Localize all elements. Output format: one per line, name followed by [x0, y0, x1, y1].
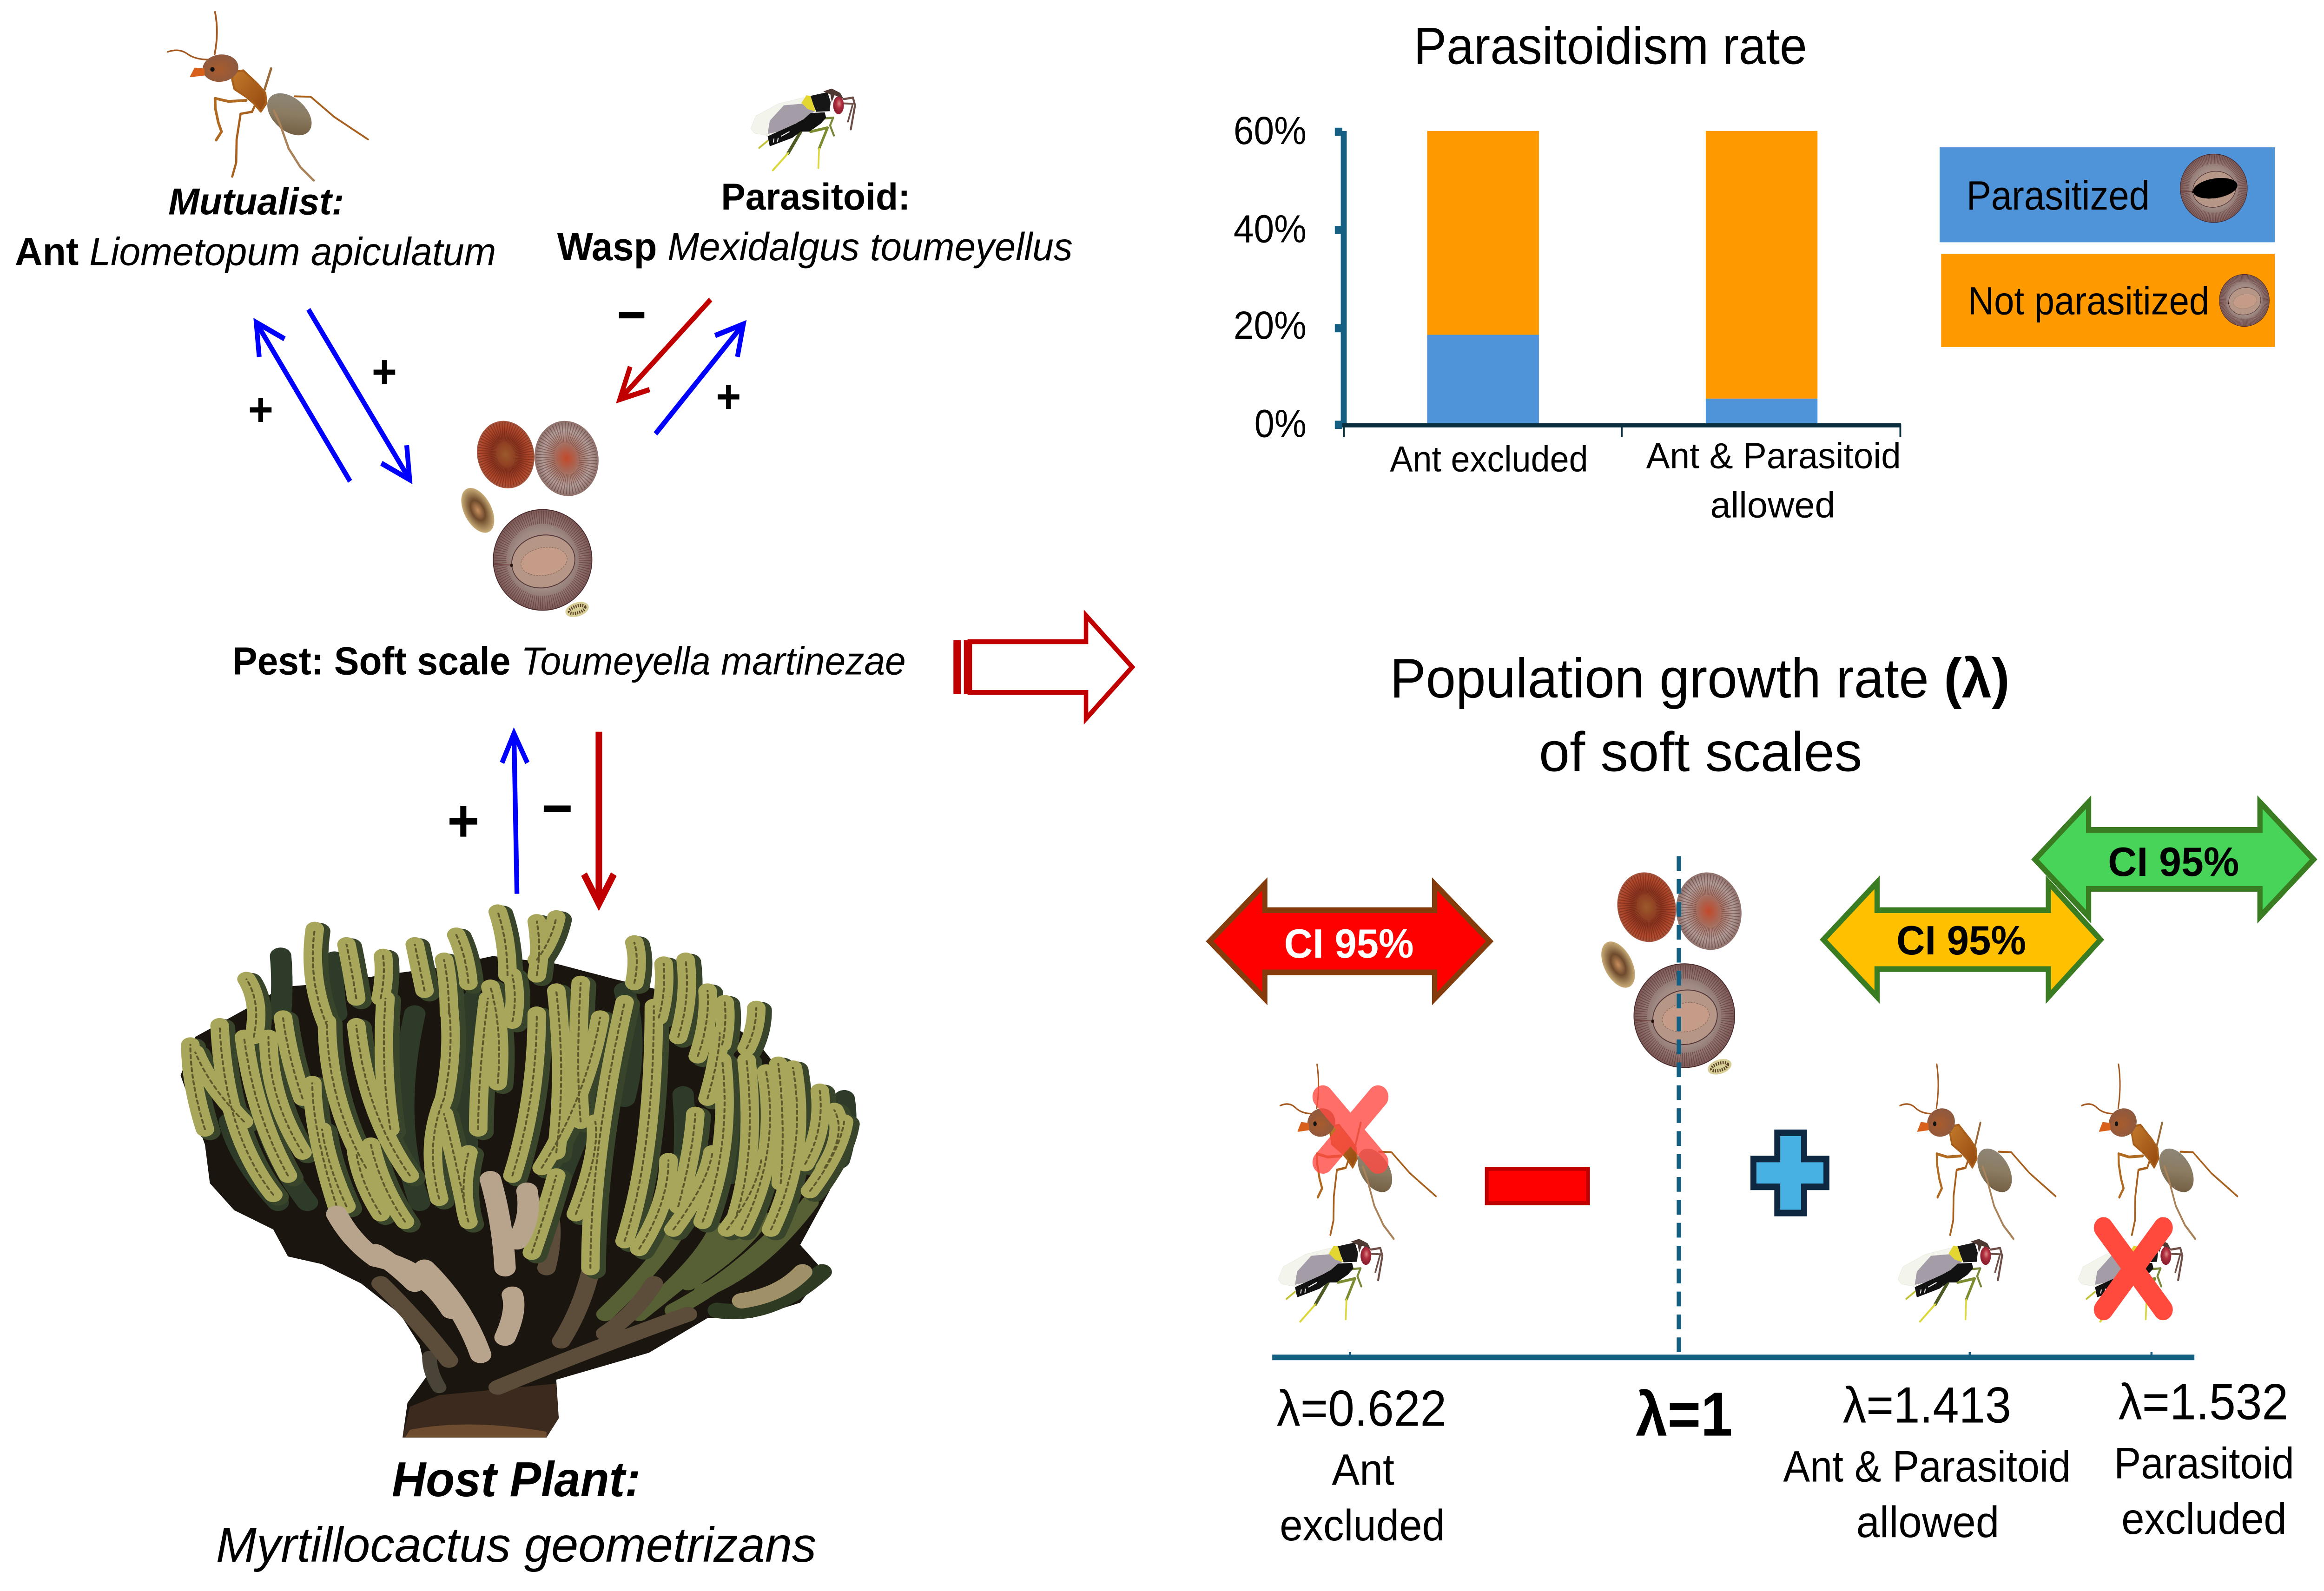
legend: not parasitized: Not parasitized	[1968, 279, 2209, 323]
icon: minus	[1487, 1169, 1588, 1203]
y axis labels: 20%	[1234, 304, 1307, 348]
arrow: wasp to pest	[620, 300, 711, 400]
text: pest label: Pest: Soft scale Toumeyella martinezae	[232, 639, 906, 683]
y axis labels	[1234, 109, 1307, 446]
confidence interval: ant and parasitoid allowed	[1823, 882, 2100, 997]
arrow: ant to pest	[308, 309, 409, 480]
text: host plant heading: Host Plant:	[392, 1453, 640, 1507]
legend: parasitized	[1940, 147, 2275, 242]
sign: minus wasp: −	[617, 284, 647, 346]
heading: population growth rate: Population growth rate (λ)	[1390, 647, 2010, 710]
bar: ant excluded	[1427, 131, 1539, 425]
label: ant and parasitoid allowed value: allowed	[1856, 1498, 1999, 1547]
panel: food web diagram	[15, 12, 1132, 1572]
sign: plus ant: +	[372, 345, 397, 398]
arrow: pest to wasp	[655, 324, 743, 434]
label: parasitoid excluded value: Parasitoid	[2114, 1439, 2294, 1488]
icon: ant excluded	[1280, 1065, 1436, 1239]
text: mutualist heading: Mutualist:	[168, 181, 344, 223]
sign: plus wasp: +	[716, 370, 741, 423]
icon: host plant cactus	[181, 912, 849, 1438]
lambda axis	[1272, 1352, 2194, 1360]
icon: wasp	[2078, 1239, 2182, 1321]
icon: plus	[1753, 1133, 1826, 1213]
label: lambda equals one: λ=1	[1636, 1380, 1733, 1449]
y axis labels: 40%	[1234, 207, 1307, 251]
label: ant excluded value: Ant	[1332, 1446, 1394, 1494]
icon: ant	[2082, 1065, 2238, 1239]
confidence interval: parasitoid excluded	[2035, 802, 2314, 917]
icon: wasp	[1278, 1239, 1382, 1321]
sign: plus plant: +	[447, 787, 479, 855]
confidence interval: ant excluded: CI 95%	[1284, 920, 1414, 966]
icon: ant mutualist	[168, 12, 368, 180]
confidence interval: ant excluded	[1210, 884, 1490, 999]
label: ant and parasitoid allowed value	[1783, 1377, 2071, 1547]
icon: ant	[1900, 1065, 2056, 1239]
group: ant excluded icons	[1278, 1065, 1436, 1321]
group: ant and parasitoid allowed icons	[1898, 1065, 2056, 1321]
bar: ant and parasitoid allowed	[1706, 131, 1817, 425]
text: ant species: Ant Liometopum apiculatum	[15, 230, 496, 274]
reference line at lambda 1	[1678, 856, 1680, 1355]
label: ant and parasitoid allowed value: λ=1.413	[1843, 1377, 2011, 1434]
label: ant excluded value: excluded	[1280, 1501, 1445, 1550]
sign: minus plant: −	[541, 775, 573, 841]
label: ant and parasitoid allowed value: Ant & Parasitoid	[1783, 1442, 2071, 1491]
label: ant excluded value	[1277, 1380, 1446, 1550]
x axis labels: allowed	[1710, 485, 1835, 525]
icon: soft scale insects	[1594, 861, 1751, 1077]
text: parasitoid heading: Parasitoid:	[721, 176, 910, 218]
x axis	[1342, 423, 1901, 437]
sign: plus left: +	[248, 383, 273, 436]
group: parasitoid excluded icons	[2078, 1065, 2238, 1321]
chart title: Parasitoidism rate	[1414, 16, 1807, 75]
arrow: outlined transition arrow	[953, 616, 1132, 719]
x axis labels: Ant & Parasitoid	[1646, 435, 1901, 476]
icon: red cross over wasp	[2104, 1228, 2163, 1309]
icon: red cross over ant	[1323, 1097, 1378, 1162]
confidence interval: parasitoid excluded: CI 95%	[2108, 839, 2239, 885]
label: parasitoid excluded value	[2114, 1374, 2294, 1544]
arrow: pest to ant	[256, 322, 350, 481]
text: host plant species: Myrtillocactus geometrizans	[216, 1518, 816, 1572]
label: parasitoid excluded value: excluded	[2121, 1494, 2287, 1544]
heading: of soft scales: of soft scales	[1539, 721, 1862, 783]
text: wasp species: Wasp Mexidalgus toumeyellus	[557, 225, 1073, 269]
confidence interval: ant and parasitoid allowed: CI 95%	[1896, 917, 2026, 963]
y axis	[1335, 128, 1347, 429]
arrow: plant to pest	[502, 733, 528, 894]
x axis labels	[1390, 435, 1901, 525]
arrow: pest to plant	[584, 732, 614, 904]
legend: not parasitized	[1941, 254, 2275, 347]
icon: parasitoid wasp	[751, 89, 855, 171]
icon: wasp	[1898, 1239, 2002, 1321]
legend: parasitized: Parasitized	[1967, 172, 2150, 218]
y axis labels: 0%	[1254, 402, 1307, 446]
panel: parasitoidism rate chart	[1234, 16, 2275, 525]
panel: population growth rate	[1210, 647, 2314, 1550]
x axis labels: Ant excluded	[1390, 439, 1588, 479]
y axis labels: 60%	[1234, 109, 1307, 153]
label: ant excluded value: λ=0.622	[1277, 1380, 1446, 1437]
icon: soft scale insects	[455, 410, 608, 619]
label: parasitoid excluded value: λ=1.532	[2119, 1374, 2288, 1430]
